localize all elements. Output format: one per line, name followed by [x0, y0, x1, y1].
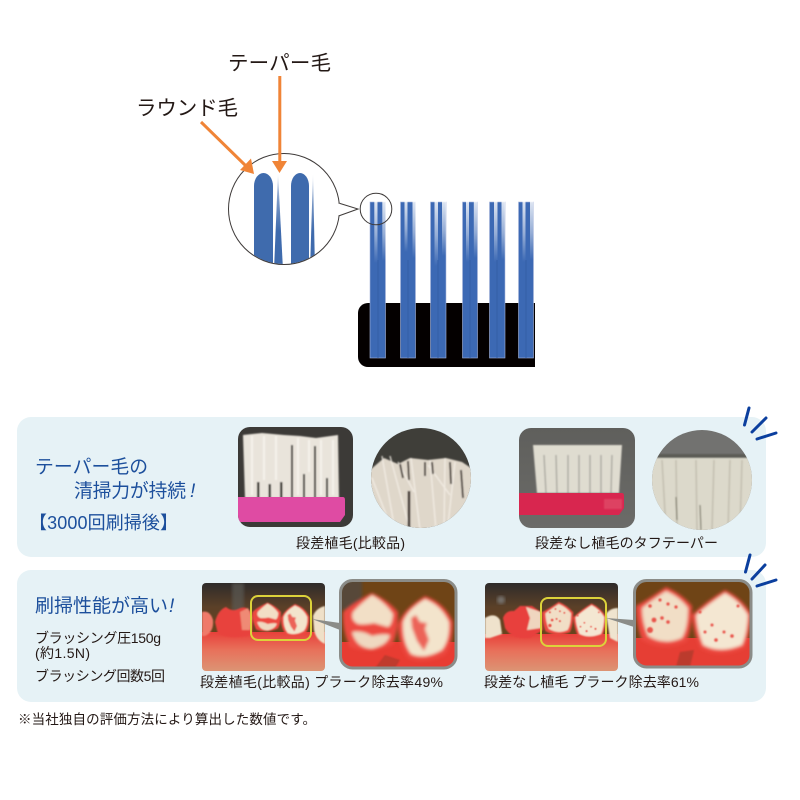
- caption: flat taper brush: 段差なし植毛のタフテーパー: [535, 535, 718, 551]
- heading: high brushing performance: !: [169, 596, 175, 617]
- tuft 1: [370, 201, 386, 358]
- photo: stepped brush: [238, 427, 353, 527]
- panel: durability comparison: [17, 417, 766, 557]
- label: round bristle: ラウンド毛: [136, 97, 238, 120]
- toothbrush head: [358, 200, 535, 367]
- caption: flat brush 61 percent: 段差なし植毛 プラーク除去率61%: [484, 674, 699, 690]
- panel: plaque removal comparison: [17, 570, 766, 702]
- subheading: after 3000 brushings: 【3000回刷掃後】: [29, 513, 178, 533]
- arrow: to taper bristle: [272, 76, 287, 173]
- heading: cleaning power lasts: [35, 456, 196, 502]
- caption: stepped brush: 段差植毛(比較品): [296, 535, 405, 551]
- test conditions: ブラッシング圧150g: [35, 630, 161, 646]
- magnified bristle circle: [228, 154, 358, 270]
- test conditions: ブラッシング回数5回: [35, 668, 165, 684]
- heading: cleaning power lasts: テーパー毛の: [35, 456, 148, 477]
- photo: flat brush teeth: [485, 583, 618, 671]
- tuft 4: [462, 200, 478, 358]
- detail ring on first tuft: [360, 193, 392, 225]
- heading: high brushing performance: 刷掃性能が高い: [35, 595, 168, 617]
- highlight box: [251, 596, 311, 640]
- icon: emphasis ticks top: [744, 408, 776, 439]
- photo: flat taper brush close-up: [650, 428, 754, 534]
- highlight box: [541, 598, 606, 646]
- brush base: [358, 303, 535, 367]
- heading: cleaning power lasts: !: [190, 481, 196, 502]
- tuft 2: [400, 200, 416, 358]
- tuft 3: [430, 200, 446, 358]
- zoom: flat brush teeth: [634, 580, 751, 668]
- caption: stepped brush 49 percent: 段差植毛(比較品) プラーク除去率49%: [200, 674, 443, 690]
- photo: stepped brush teeth: [202, 583, 325, 671]
- pointer wedge: [312, 619, 340, 630]
- tuft 6: [518, 200, 534, 358]
- photo: stepped brush close-up: [370, 428, 474, 532]
- photo: flat taper brush: [519, 428, 635, 528]
- arrow: to round bristle: [201, 122, 254, 174]
- footnote: ※当社独自の評価方法により算出した数値です。: [18, 712, 316, 727]
- label: taper bristle: テーパー毛: [228, 52, 331, 75]
- zoom: stepped brush teeth: [340, 580, 456, 670]
- heading: cleaning power lasts: 清掃力が持続: [74, 480, 186, 501]
- pointer wedge: [606, 618, 634, 627]
- test conditions: (約1.5N): [35, 645, 90, 661]
- icon: emphasis ticks bottom: [746, 555, 776, 586]
- test conditions: [35, 630, 165, 684]
- tuft 5: [490, 200, 505, 358]
